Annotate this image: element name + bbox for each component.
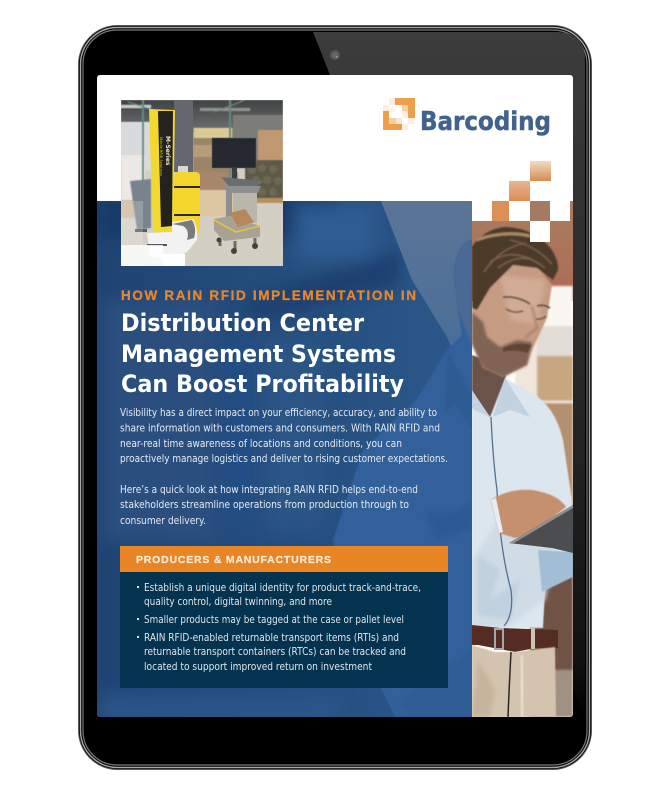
blue background with blurred warehouse bbox=[97, 195, 472, 725]
tablet device frame bbox=[78, 26, 592, 770]
decorative pixel squares bbox=[472, 161, 570, 242]
intro paragraph: near-real time awareness of locations and conditions, you can bbox=[120, 438, 402, 450]
sleeve bbox=[538, 550, 573, 592]
title: Management Systems bbox=[121, 340, 396, 368]
title: Can Boost Profitability bbox=[121, 370, 404, 398]
face bbox=[472, 245, 552, 377]
nose shadow bbox=[525, 306, 537, 338]
bezel glare bbox=[313, 32, 585, 717]
panel body bbox=[120, 572, 448, 688]
hand bbox=[491, 490, 566, 538]
trousers bbox=[472, 645, 556, 717]
belt bbox=[472, 625, 558, 652]
title bbox=[121, 309, 404, 398]
panel body: Smaller products may be tagged at the case or pallet level bbox=[144, 614, 404, 626]
yellow safety barrel bbox=[174, 172, 200, 234]
intro paragraph bbox=[120, 407, 448, 465]
second paragraph bbox=[120, 484, 418, 527]
logo wordmark: Barcoding bbox=[420, 107, 551, 137]
cart with monitor bbox=[212, 138, 264, 254]
intro paragraph: share information with customers and consumers. With RAIN RFID and bbox=[120, 422, 440, 434]
panel body: located to support improved return on investment bbox=[144, 661, 372, 673]
panel heading bar bbox=[120, 546, 448, 572]
panel body: quality control, digital twinning, and more bbox=[144, 596, 332, 608]
neck bbox=[472, 355, 506, 417]
panel body: Establish a unique digital identity for product track-and-trace, bbox=[144, 582, 421, 594]
blurred warehouse background bbox=[515, 286, 573, 717]
intro paragraph: proactively manage logistics and deliver to rising customer expectations. bbox=[120, 453, 448, 465]
warehouse RFID robot photo bbox=[121, 100, 283, 266]
grey trash bin bbox=[130, 179, 151, 230]
subtitle: HOW RAIN RFID IMPLEMENTATION IN bbox=[121, 288, 416, 303]
robot base bbox=[147, 219, 198, 254]
panel: producers and manufacturers bbox=[120, 546, 448, 688]
photo: man using a tablet bbox=[472, 201, 573, 717]
hair bbox=[472, 227, 558, 310]
second paragraph: Here’s a quick look at how integrating RAIN RFID helps end-to-end bbox=[120, 484, 418, 496]
camera bbox=[330, 50, 340, 60]
collar bbox=[472, 378, 530, 417]
brows and eyes bbox=[503, 297, 550, 308]
shirt bbox=[472, 378, 573, 628]
second paragraph: consumer delivery. bbox=[120, 515, 206, 527]
translucent man silhouette bbox=[381, 201, 472, 366]
support column bbox=[174, 100, 193, 172]
panel heading bar: PRODUCERS & MANUFACTURERS bbox=[136, 554, 331, 566]
panel body: RAIN RFID-enabled returnable transport items (RTIs) and bbox=[144, 632, 399, 644]
panel body: returnable transport containers (RTCs) can be tracked and bbox=[144, 646, 406, 658]
logo: Barcoding bbox=[383, 98, 551, 137]
yellow scanner panel: Mobile RFID Solutions bbox=[159, 137, 163, 176]
second paragraph: stakeholders streamline operations from production through to bbox=[120, 499, 409, 511]
beard bbox=[472, 312, 532, 377]
logo mark bbox=[383, 98, 415, 130]
held tablet bbox=[509, 505, 573, 553]
intro paragraph: Visibility has a direct impact on your efficiency, accuracy, and ability to bbox=[120, 407, 437, 419]
tablet screen: document page bbox=[97, 75, 573, 725]
yellow scanner panel bbox=[149, 109, 175, 232]
title: Distribution Center bbox=[121, 309, 364, 337]
white pixel squares on photo bbox=[121, 201, 143, 245]
head bbox=[472, 227, 558, 377]
yellow scanner panel: M-Series bbox=[164, 136, 171, 166]
